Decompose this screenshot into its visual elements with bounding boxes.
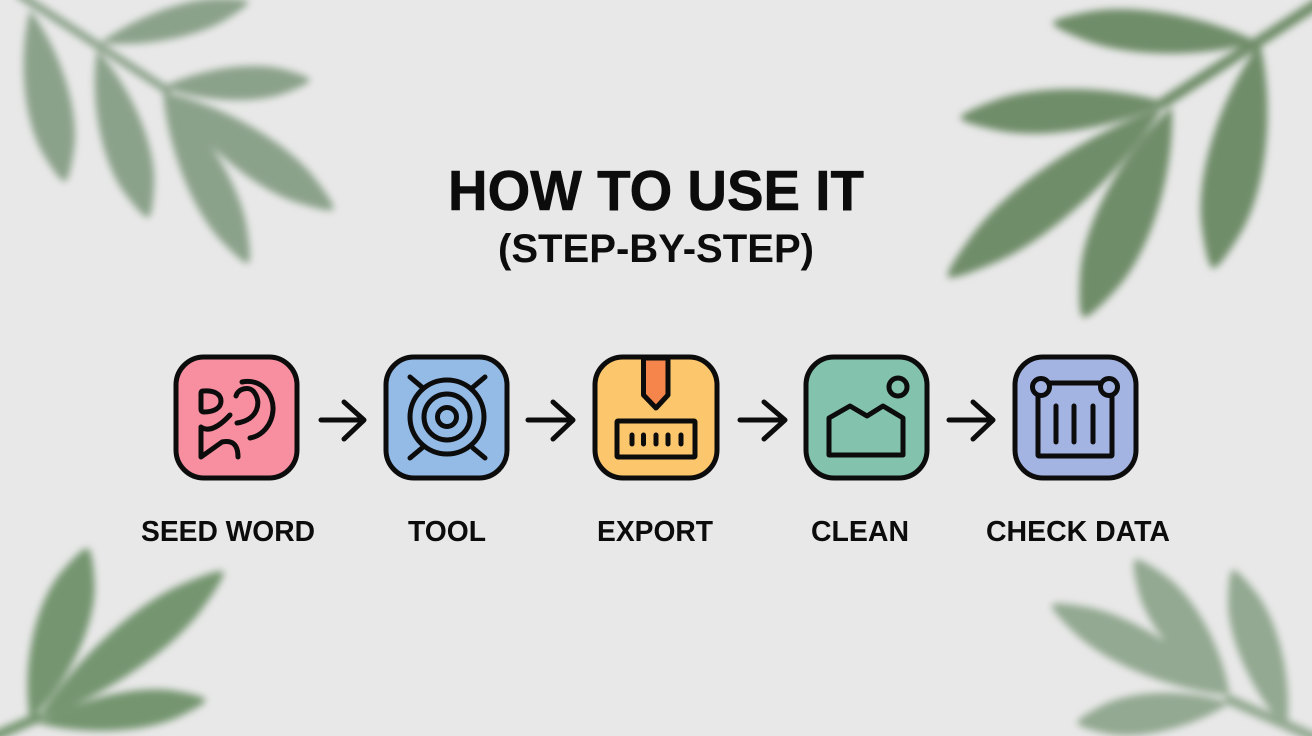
icon: check data — [1015, 357, 1136, 478]
leaves: top right — [932, 2, 1312, 328]
arrow 1 — [321, 402, 364, 439]
leaves: bottom left — [0, 540, 238, 736]
subtitle: (STEP-BY-STEP) — [498, 227, 814, 271]
label: tool: TOOL — [408, 516, 486, 548]
icon: tool — [386, 357, 507, 478]
arrow 2 — [528, 402, 573, 439]
label: clean: CLEAN — [811, 516, 909, 548]
leaves: bottom right — [1042, 547, 1312, 736]
icon: clean — [806, 357, 927, 478]
arrow 4 — [949, 402, 993, 439]
icon: export — [595, 357, 717, 478]
title: HOW TO USE IT — [448, 159, 864, 223]
leaves: top left — [8, 0, 346, 272]
arrow 3 — [740, 402, 785, 439]
label: seed word: SEED WORD — [141, 516, 315, 548]
icon: seed word — [176, 357, 297, 478]
label: export: EXPORT — [597, 516, 713, 548]
label: check data: CHECK DATA — [986, 516, 1170, 548]
